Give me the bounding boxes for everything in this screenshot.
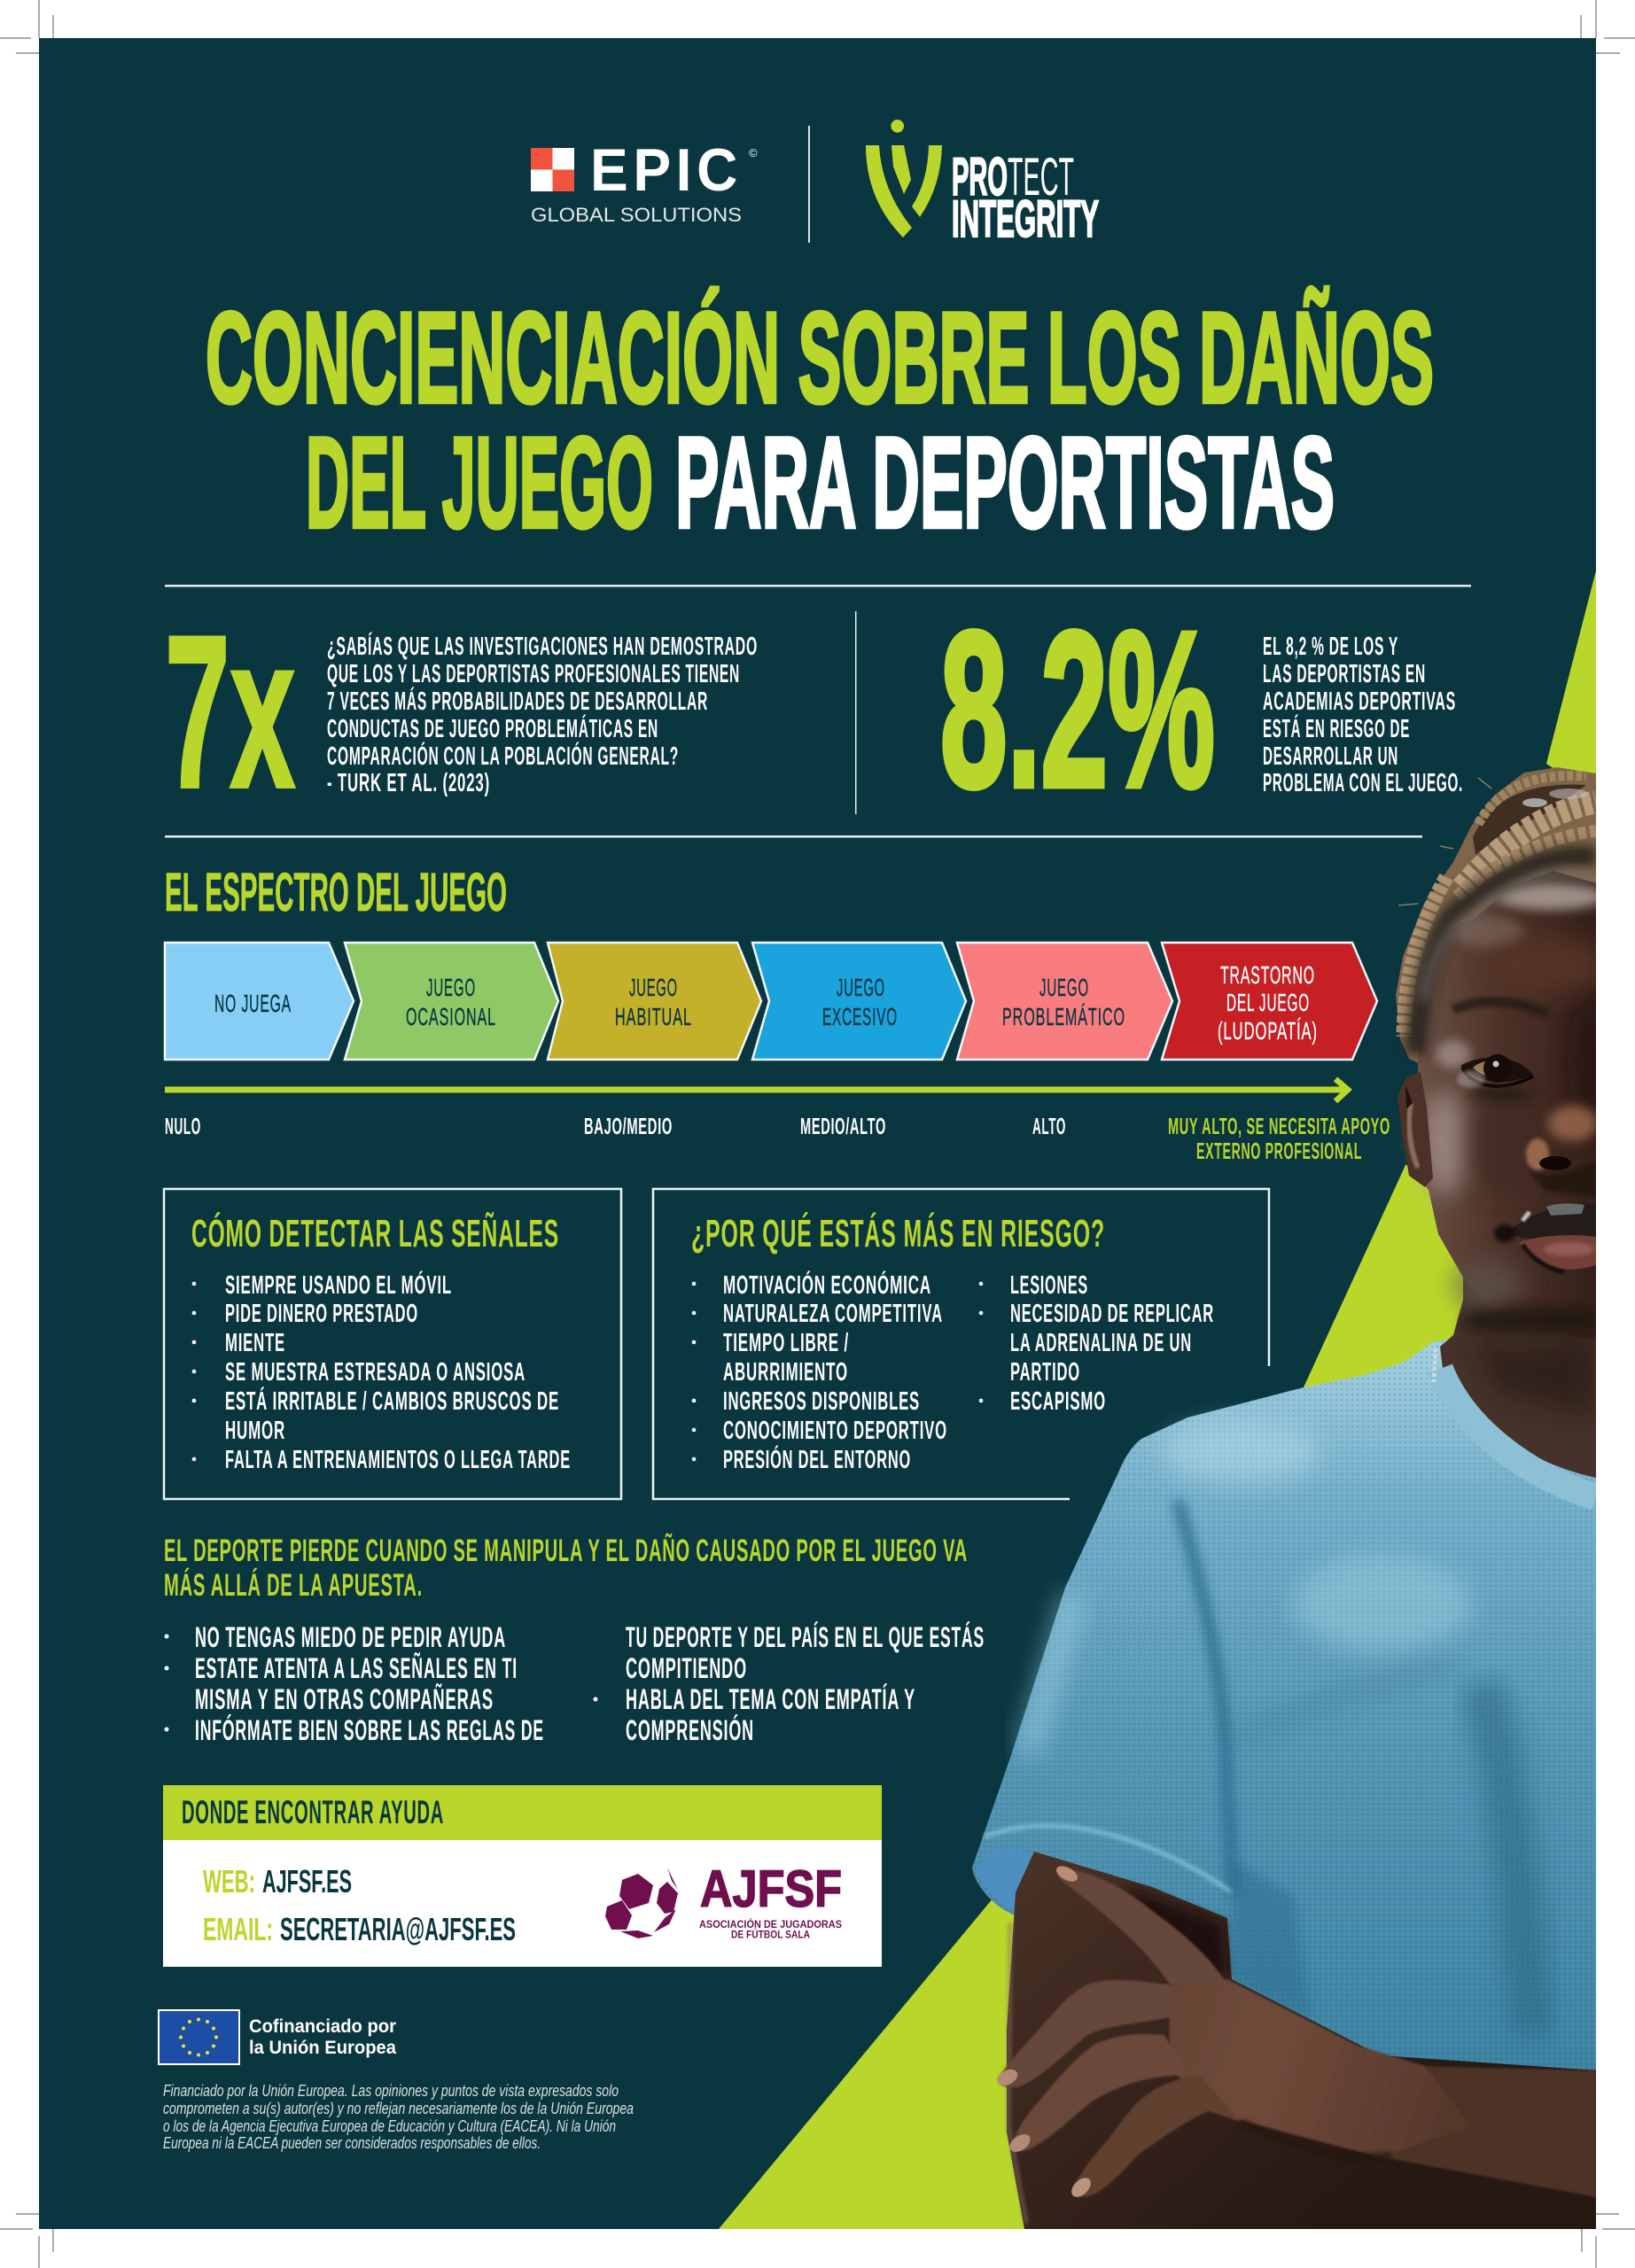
stat: 8.2%: ESTÁ EN RIESGO DE <box>1263 713 1410 743</box>
panel: cómo detectar las señales: FALTA A ENTRENAMIENTOS O LLEGA TARDE <box>225 1446 571 1474</box>
panel: cómo detectar las señales: SE MUESTRA ESTRESADA O ANSIOSA <box>225 1358 526 1386</box>
stat: 8.2%: EL 8,2 % DE LOS Y <box>1263 633 1398 661</box>
hair <box>1396 767 1596 1063</box>
panel: donde encontrar ayuda: WEB: <box>203 1863 255 1899</box>
panel: por qué estás más en riesgo: INGRESOS DISPONIBLES <box>723 1387 920 1416</box>
disclaimer: Europea ni la EACEA pueden ser considerados responsables de ellos. <box>163 2134 541 2152</box>
text: cofinanciado por la Unión Europea: la Unión Europea <box>249 2038 396 2058</box>
arrow: risk scale <box>165 1079 1348 1101</box>
chevron: juego habitual: HABITUAL <box>615 1003 692 1030</box>
stat: 7x: COMPARACIÓN CON LA POBLACIÓN GENERAL? <box>327 741 679 771</box>
stat: 8.2%: ACADEMIAS DEPORTIVAS <box>1263 687 1456 716</box>
logo: AJFSF <box>605 1860 842 1940</box>
t-shirt <box>972 1340 1596 2070</box>
stat: 8.2%: PROBLEMA CON EL JUEGO. <box>1263 769 1463 797</box>
eye <box>1460 1058 1533 1082</box>
face <box>1418 850 1613 1340</box>
chevron: juego problemático <box>957 943 1172 1060</box>
advice list: MISMA Y EN OTRAS COMPAÑERAS <box>195 1683 494 1715</box>
panel: cómo detectar las señales: SIEMPRE USANDO EL MÓVIL <box>225 1270 452 1300</box>
neck <box>1434 1267 1596 1497</box>
rules around stats <box>165 585 1471 838</box>
panel: donde encontrar ayuda: SECRETARIA@AJFSF.ES <box>280 1911 516 1947</box>
logo: Protect Integrity <box>866 120 1099 248</box>
chevron: juego ocasional <box>345 943 558 1060</box>
title: DEL JUEGO <box>306 410 653 555</box>
stat: 8.2%: LAS DEPORTISTAS EN <box>1263 660 1426 688</box>
stat: 7x: CONDUCTAS DE JUEGO PROBLEMÁTICAS EN <box>327 713 658 743</box>
icon: EU flag <box>159 2010 239 2064</box>
chevron: no juega <box>165 943 354 1060</box>
chevron: juego ocasional: JUEGO <box>426 974 476 1001</box>
panel: donde encontrar ayuda <box>163 1785 882 1967</box>
text: cofinanciado por la Unión Europea <box>249 2016 396 2058</box>
stat: 7x: 7 VECES MÁS PROBABILIDADES DE DESARROLLAR <box>327 686 708 716</box>
logo: EPIC Global Solutions: © <box>749 146 758 159</box>
statement: el deporte pierde: EL DEPORTE PIERDE CUANDO SE MANIPULA Y EL DAÑO CAUSADO POR EL JUEGO VA <box>164 1534 968 1568</box>
advice list: NO TENGAS MIEDO DE PEDIR AYUDA <box>195 1621 506 1653</box>
logo: EPIC Global Solutions <box>531 136 758 226</box>
risk scale labels: MUY ALTO, SE NECESITA APOYO <box>1168 1113 1390 1139</box>
logo: EPIC Global Solutions: GLOBAL SOLUTIONS <box>531 204 742 226</box>
chevron: juego ocasional: OCASIONAL <box>406 1003 496 1030</box>
statement: el deporte pierde: MÁS ALLÁ DE LA APUESTA. <box>164 1567 423 1603</box>
green background shapes <box>719 571 1596 2229</box>
panel: donde encontrar ayuda: AJFSF.ES <box>262 1863 352 1899</box>
risk scale labels: MEDIO/ALTO <box>800 1113 886 1139</box>
advice list: INFÓRMATE BIEN SOBRE LAS REGLAS DE <box>195 1714 544 1746</box>
panel: por qué estás más en riesgo: ESCAPISMO <box>1010 1387 1106 1416</box>
panel: por qué estás más en riesgo: NATURALEZA COMPETITIVA <box>723 1300 943 1328</box>
chevron: trastorno del juego: (LUDOPATÍA) <box>1218 1017 1318 1045</box>
advice list <box>165 1621 985 1746</box>
advice list: COMPRENSIÓN <box>626 1714 754 1746</box>
risk scale labels: EXTERNO PROFESIONAL <box>1196 1138 1362 1164</box>
chevron: juego problemático: PROBLEMÁTICO <box>1002 1003 1125 1030</box>
panel: por qué estás más en riesgo: PRESIÓN DEL ENTORNO <box>723 1444 911 1474</box>
panel: cómo detectar las señales: PIDE DINERO PRESTADO <box>225 1300 418 1328</box>
panel: por qué estás más en riesgo: LA ADRENALINA DE UN <box>1010 1329 1192 1357</box>
chevron: juego excesivo: EXCESIVO <box>822 1003 898 1030</box>
panel: por qué estás más en riesgo: ABURRIMIENTO <box>723 1358 848 1386</box>
crossed arms <box>995 1852 1596 2229</box>
ear <box>1398 1072 1433 1187</box>
logo: Protect Integrity: TECT <box>1008 147 1074 206</box>
panel: cómo detectar las señales: ESTÁ IRRITABLE / CAMBIOS BRUSCOS DE <box>225 1386 559 1416</box>
lips <box>1507 1203 1596 1239</box>
risk scale labels: ALTO <box>1032 1113 1066 1139</box>
stat: 8.2%: 8.2% <box>940 586 1215 833</box>
text: cofinanciado por la Unión Europea: Cofinanciado por <box>249 2016 396 2037</box>
logo divider <box>808 126 810 243</box>
panel: por qué estás más en riesgo <box>653 1189 1269 1499</box>
panel: por qué estás más en riesgo: MOTIVACIÓN ECONÓMICA <box>723 1270 931 1300</box>
panel: donde encontrar ayuda: EMAIL: <box>203 1911 273 1947</box>
stat: 7x: - TURK ET AL. (2023) <box>327 769 490 797</box>
chevron: trastorno del juego: DEL JUEGO <box>1226 989 1310 1016</box>
stat: 7x: ¿SABÍAS QUE LAS INVESTIGACIONES HAN DEMOSTRADO <box>327 631 758 661</box>
disclaimer: comprometen a su(s) autor(es) y no reflejan necesariamente los de la Unión Europea <box>163 2100 634 2117</box>
advice list: HABLA DEL TEMA CON EMPATÍA Y <box>626 1683 915 1715</box>
chevron: juego excesivo: JUEGO <box>837 974 885 1001</box>
disclaimer: Financiado por la Unión Europea. Las opiniones y puntos de vista expresados solo <box>163 2082 619 2100</box>
panel: donde encontrar ayuda: DONDE ENCONTRAR AYUDA <box>182 1794 444 1830</box>
logo: AJFSF: AJFSF <box>700 1860 842 1918</box>
chevron: juego habitual: JUEGO <box>629 974 678 1001</box>
risk scale labels: NULO <box>165 1113 201 1139</box>
chevron: no juega: NO JUEGA <box>214 990 292 1017</box>
title <box>206 285 1434 555</box>
risk scale labels <box>165 1113 1390 1164</box>
eyebrow <box>1453 1002 1546 1014</box>
panel: por qué estás más en riesgo: PARTIDO <box>1010 1358 1080 1386</box>
panel: cómo detectar las señales: MIENTE <box>225 1329 285 1357</box>
logo: AJFSF: DE FÚTBOL SALA <box>731 1928 810 1940</box>
stat: 7x <box>165 590 758 833</box>
chevron: trastorno del juego: TRASTORNO <box>1220 961 1315 989</box>
nose <box>1548 1106 1598 1141</box>
statement: el deporte pierde <box>164 1534 968 1603</box>
chevron: trastorno del juego <box>1162 943 1377 1060</box>
chevron: juego habitual <box>548 943 761 1060</box>
logo: Protect Integrity: INTEGRITY <box>952 190 1099 248</box>
photo: athlete with crossed arms <box>972 767 1613 2229</box>
stat: 7x: 7x <box>165 590 295 833</box>
panel: cómo detectar las señales: CÓMO DETECTAR LAS SEÑALES <box>191 1211 559 1255</box>
panel: por qué estás más en riesgo: NECESIDAD DE REPLICAR <box>1010 1300 1214 1328</box>
logo: AJFSF: ASOCIACIÓN DE JUGADORAS <box>699 1917 842 1930</box>
panel: cómo detectar las señales <box>164 1189 621 1499</box>
disclaimer <box>163 2082 634 2152</box>
chevron: juego excesivo <box>752 943 966 1060</box>
text: EL ESPECTRO DEL JUEGO <box>165 862 507 922</box>
panel: por qué estás más en riesgo: CONOCIMIENTO DEPORTIVO <box>723 1417 947 1445</box>
logo: EPIC Global Solutions: EPIC <box>590 136 743 204</box>
advice list: ESTATE ATENTA A LAS SEÑALES EN TI <box>195 1652 518 1684</box>
stat: 8.2%: DESARROLLAR UN <box>1263 742 1398 771</box>
panel: cómo detectar las señales: HUMOR <box>225 1417 285 1445</box>
disclaimer: o los de la Agencia Ejecutiva Europea de Educación y Cultura (EACEA). Ni la Unión <box>163 2117 616 2135</box>
panel: por qué estás más en riesgo: LESIONES <box>1010 1271 1088 1300</box>
stat: 7x: QUE LOS Y LAS DEPORTISTAS PROFESIONALES TIENEN <box>327 660 740 688</box>
advice list: TU DEPORTE Y DEL PAÍS EN EL QUE ESTÁS <box>626 1621 985 1653</box>
advice list: COMPITIENDO <box>626 1652 747 1684</box>
panel: por qué estás más en riesgo: ¿POR QUÉ ESTÁS MÁS EN RIESGO? <box>691 1211 1105 1255</box>
panel: por qué estás más en riesgo: TIEMPO LIBRE / <box>723 1329 849 1357</box>
logo: Protect Integrity: PRO <box>952 147 1008 206</box>
chevron: juego problemático: JUEGO <box>1039 974 1089 1001</box>
risk scale labels: BAJO/MEDIO <box>584 1113 673 1139</box>
